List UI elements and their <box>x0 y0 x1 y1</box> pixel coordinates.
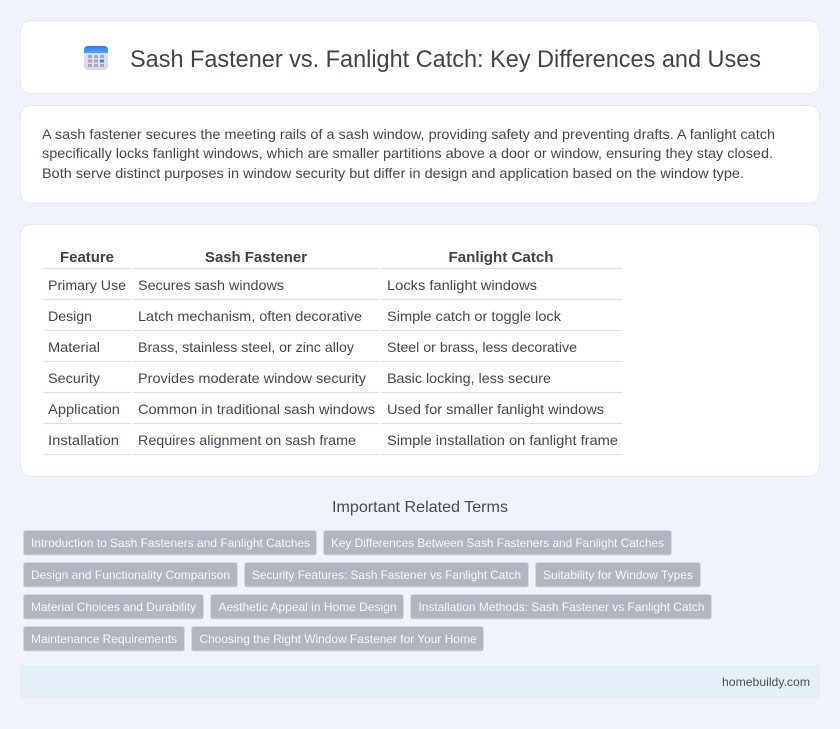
panel: comparison table <box>20 224 820 476</box>
table header: Feature <box>60 249 114 266</box>
row: security: Provides moderate window security <box>138 370 366 386</box>
tag row 1: Key Differences Between Sash Fasteners and Fanlight Catches <box>331 536 664 550</box>
table header: Fanlight Catch <box>448 249 554 266</box>
tag row 1: Introduction to Sash Fasteners and Fanlight Catches <box>31 536 310 550</box>
panel: intro paragraph: specifically locks fanlight windows, which are smaller partitions above a door or window, ensuring they stay closed. <box>42 145 773 161</box>
row: design: Design <box>48 308 92 324</box>
row: security: Security <box>48 370 100 386</box>
row: primary use <box>48 277 537 293</box>
row: material: Steel or brass, less decorative <box>387 339 577 355</box>
panel: intro paragraph: Both serve distinct purposes in window security but differ in design and application based on the window type. <box>42 165 744 181</box>
row: installation: Installation <box>48 432 119 448</box>
table header: Sash Fastener <box>205 249 307 266</box>
tag row 2: Suitability for Window Types <box>543 568 693 582</box>
row: security: Basic locking, less secure <box>387 370 551 386</box>
row: primary use: Secures sash windows <box>138 277 284 293</box>
tag row 3: Aesthetic Appeal in Home Design <box>218 600 396 614</box>
row: installation: Simple installation on fanlight frame <box>387 432 618 448</box>
tag row 1 <box>24 530 672 555</box>
row: installation: Requires alignment on sash frame <box>138 432 356 448</box>
row: primary use: Primary Use <box>48 277 126 293</box>
tag row 4: Choosing the Right Window Fastener for Your Home <box>200 632 477 646</box>
row: design: Simple catch or toggle lock <box>387 308 562 324</box>
icon: calendar <box>84 46 108 70</box>
row: security <box>48 370 551 386</box>
row: application: Application <box>48 401 120 417</box>
row: design: Latch mechanism, often decorative <box>138 308 362 324</box>
related term tags <box>24 530 712 651</box>
tag row 3 <box>24 594 712 619</box>
row: material <box>48 339 577 355</box>
panel: intro paragraph <box>20 106 820 204</box>
row: application: Common in traditional sash windows <box>138 401 375 417</box>
tag row 3: Material Choices and Durability <box>31 600 196 614</box>
footer bar <box>20 665 820 699</box>
row: design <box>48 308 562 324</box>
row: material: Material <box>48 339 100 355</box>
heading: related terms: Important Related Terms <box>332 499 508 516</box>
row: application: Used for smaller fanlight windows <box>387 401 604 417</box>
table header <box>60 249 554 266</box>
tag row 2: Security Features: Sash Fastener vs Fanlight Catch <box>252 568 521 582</box>
title: Sash Fastener vs. Fanlight Catch: Key Differences and Uses <box>130 46 761 73</box>
row: application <box>48 401 604 417</box>
tag row 4 <box>24 626 484 651</box>
tag row 4: Maintenance Requirements <box>31 632 177 646</box>
tag row 3: Installation Methods: Sash Fastener vs Fanlight Catch <box>418 600 704 614</box>
row: material: Brass, stainless steel, or zinc alloy <box>138 339 354 355</box>
tag row 2 <box>24 562 700 587</box>
header panel <box>20 20 820 94</box>
footer source: homebuildy.com <box>722 675 810 689</box>
panel: intro paragraph: A sash fastener secures the meeting rails of a sash window, providing safety and preventing drafts. A fanlight catch <box>42 126 775 142</box>
row: primary use: Locks fanlight windows <box>387 277 537 293</box>
row: installation <box>48 432 618 448</box>
tag row 2: Design and Functionality Comparison <box>31 568 230 582</box>
